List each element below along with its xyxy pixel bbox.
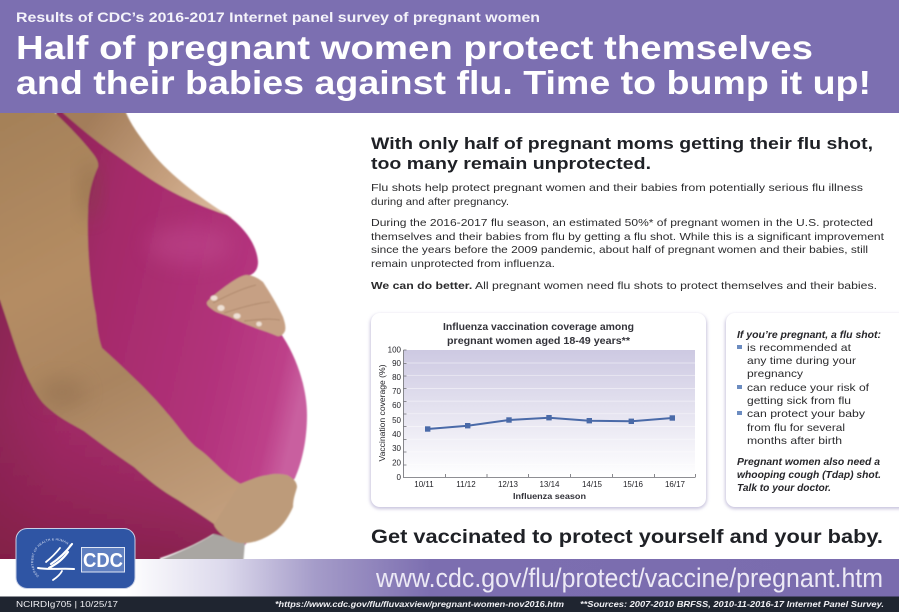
chart title: pregnant women aged 18-49 years** [447,336,630,347]
whooping cough note: whooping cough (Tdap) shot. [737,469,881,481]
whooping cough note [737,456,881,494]
chest highlight [155,228,221,261]
y axis labels: 30 [392,444,402,453]
y axis labels: 20 [392,458,402,468]
elbow shadow [47,382,76,402]
photo: pregnant woman in pink top [0,100,307,570]
whooping cough note: Talk to your doctor. [737,482,831,494]
header banner [0,0,899,113]
chart title: Influenza vaccination coverage among [443,322,634,333]
bullet list [747,342,869,447]
bullet list: can reduce your risk of [747,382,869,394]
upper hand [207,275,285,336]
bullet list: any time during your [747,355,857,367]
x axis labels: 10/11 [414,480,434,489]
y axis labels [388,346,402,482]
fingernails [210,295,262,326]
panel heading: If you’re pregnant, a flu shot: [737,329,881,341]
intro heading: too many remain unprotected. [371,154,651,173]
bullet list: from flu for several [747,422,845,434]
panel: flu shot benefits [725,313,899,509]
icon: HHS eagle [31,538,75,581]
whooping cough note: Pregnant women also need a [737,456,880,468]
y axis labels: 40 [392,430,402,439]
footer bar [0,596,899,612]
data line [425,415,675,432]
y axis labels: 100 [388,346,402,354]
icon: CDC wordmark: CDC [83,550,123,572]
y axis labels: 80 [392,373,402,382]
grey trousers [160,533,246,559]
title: Half of pregnant women protect themselves [16,29,813,66]
bullet list: pregnancy [747,368,804,380]
URL bar [0,559,899,597]
icon: HHS eagle: DEPARTMENT OF HEALTH & HUMAN SERVICES · USA [31,538,70,578]
bullet list: months after birth [747,435,842,447]
shirt lower shading [0,441,224,559]
body paragraph 2: themselves and their babies from flu by getting a flu shot. While this is a significant improvement [371,231,884,243]
y axis title: Vaccination coverage (%) [378,364,387,462]
data sources: **Sources: 2007-2010 BRFSS, 2010-11-2016-17 Internet Panel Survey. [580,600,884,609]
body paragraph 1 [371,182,863,208]
body paragraph 2: remain unprotected from influenza. [371,258,555,270]
finger creases [213,285,280,321]
x axis labels: 16/17 [665,480,686,489]
y axis labels: 50 [392,416,402,425]
bullet list: is recommended at [747,342,851,354]
x axis labels: 14/15 [582,480,603,489]
body paragraph 2: since the years before the 2009 pandemic, about half of pregnant women and their babies, still [371,244,868,256]
title [16,29,871,101]
x axis labels: 13/14 [539,480,560,489]
body paragraph 2 [371,217,884,270]
bullet list: getting sick from flu [747,395,851,407]
body paragraph 1: Flu shots help protect pregnant women and their babies from potentially serious flu illness [371,182,863,194]
intro heading [371,134,873,173]
plot area [404,350,696,478]
y axis labels: 70 [392,387,402,396]
panel: line chart [370,313,707,509]
bullet markers [737,345,742,415]
y axis labels: 0 [397,473,402,482]
x axis title: Influenza season [513,491,586,501]
bullet list: can protect your baby [747,408,866,420]
CDC HHS logo badge [16,528,136,589]
x axis labels: 12/13 [498,480,519,489]
source link: *https://www.cdc.gov/flu/fluvaxview/pregnant-women-nov2016.htm [275,600,564,609]
call to action: Get vaccinated to protect yourself and your baby. [371,526,883,548]
chart title [443,322,634,347]
lower hand [214,474,297,543]
shirt [0,100,307,570]
body paragraph 3: We can do better. All pregnant women need flu shots to protect themselves and their babies. [371,280,877,292]
body paragraph 1: during and after pregnancy. [371,196,509,208]
arm from shoulder to wrist [0,100,245,534]
intro heading: With only half of pregnant moms getting their flu shot, [371,134,873,153]
x axis labels [414,480,686,489]
document id: NCIRDIg705 | 10/25/17 [16,600,119,609]
x axis labels: 11/12 [456,480,476,489]
body paragraph 2: During the 2016-2017 flu season, an estimated 50%* of pregnant women in the U.S. protected [371,217,873,229]
armpit shadow [80,171,96,208]
title: and their babies against flu. Time to bump it up! [16,64,871,101]
y axis labels: 90 [392,359,402,368]
chest and neck skin [62,113,232,218]
x axis labels: 15/16 [623,480,644,489]
y axis labels: 60 [392,401,402,410]
survey kicker: Results of CDC’s 2016-2017 Internet panel survey of pregnant women [16,10,540,25]
